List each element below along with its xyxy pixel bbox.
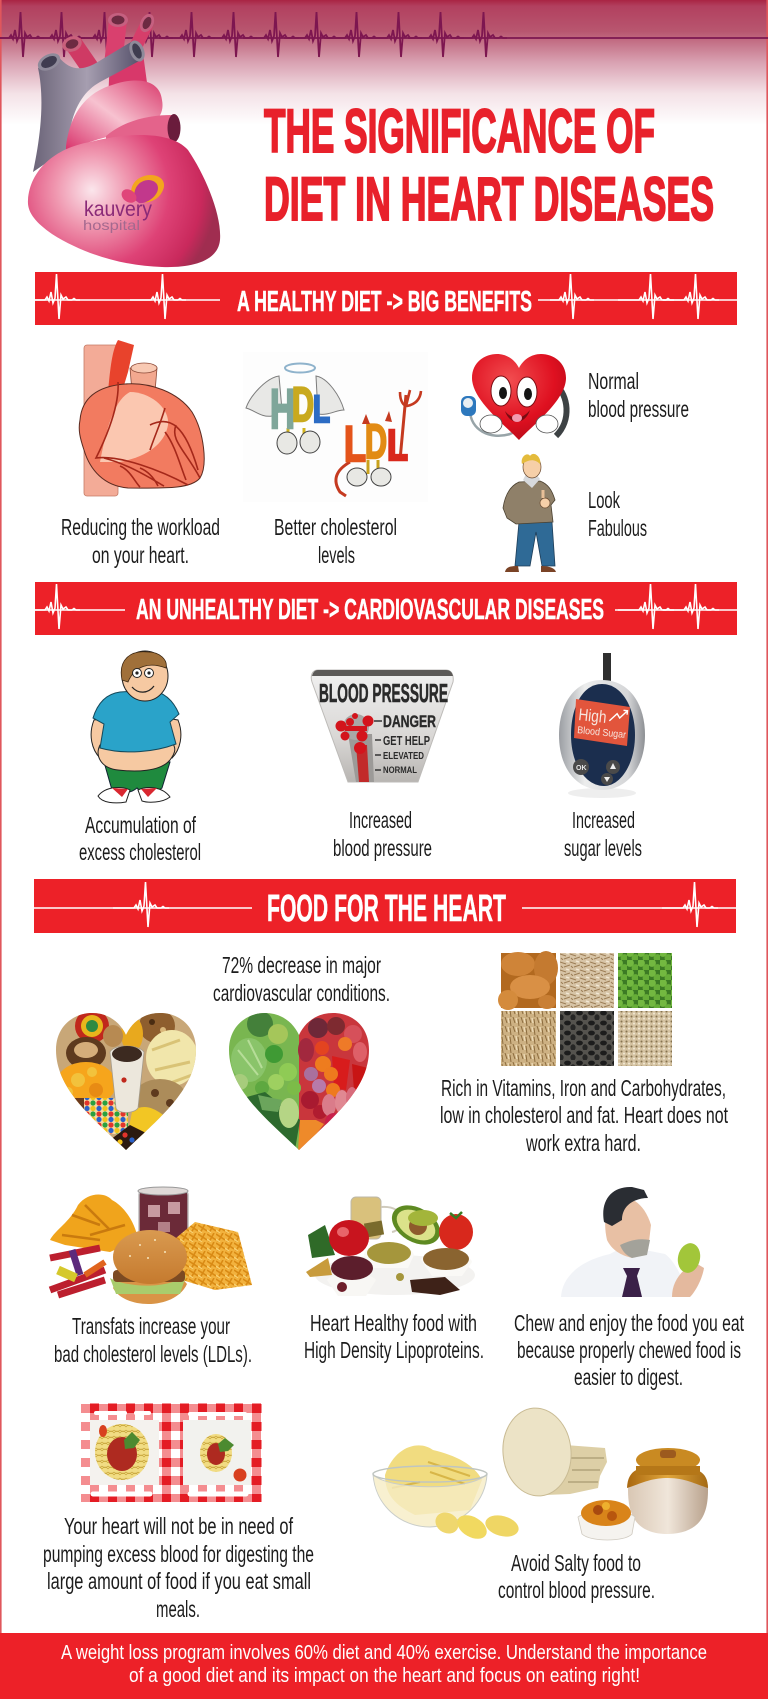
tile: oats: [560, 953, 614, 1008]
label: increased blood pressure: [333, 807, 432, 861]
label: your heart will not: meals.: [156, 1596, 200, 1622]
icon: HDL and LDL characters: L: [344, 416, 366, 472]
icon: man giving thumbs up: [503, 454, 556, 572]
pickle jar: [627, 1448, 708, 1534]
icon: glucose meter: Blood Sugar: [577, 725, 627, 741]
label: transfats: bad cholesterol levels (LDLs).: [54, 1341, 252, 1367]
label: better cholesterol: levels: [318, 542, 355, 568]
icon: junk food heart: [56, 1009, 198, 1155]
label: look fabulous: Fabulous: [588, 515, 647, 541]
header ECG line: [0, 12, 768, 57]
footer banner: [0, 1633, 768, 1699]
image grid: grains, pulses and potatoes: [498, 951, 672, 1066]
icon: large heart with logo: [28, 12, 220, 267]
label: avoid salty food: Avoid Salty food to: [511, 1550, 641, 1576]
label: your heart will not: [43, 1513, 314, 1622]
label: heart healthy food: High Density Lipoproteins.: [304, 1337, 484, 1363]
label: chew and enjoy: easier to digest.: [574, 1364, 683, 1390]
label: reducing the workload: [61, 514, 220, 568]
icon: blood pressure gauge: NORMAL: [383, 765, 417, 776]
label: reducing the workload: on your heart.: [92, 542, 189, 568]
label: 72% decrease: 72% decrease in major: [222, 952, 381, 978]
label: normal blood pressure: [588, 368, 689, 422]
label: reducing the workload: Reducing the workload: [61, 514, 220, 540]
icon: glucose meter: [559, 653, 645, 798]
label: better cholesterol: [274, 514, 397, 568]
label: heart healthy food: [304, 1310, 484, 1363]
label: 72% decrease: cardiovascular conditions.: [213, 980, 390, 1006]
label: your heart will not: large amount of food if you eat small: [47, 1568, 311, 1594]
tile: wheat: [501, 1011, 556, 1066]
icon: blood pressure gauge: BLOOD PRESSURE: [319, 678, 448, 708]
label: accumulation of excess cholesterol: excess cholesterol: [79, 839, 201, 865]
banner: a healthy diet: [24, 272, 737, 325]
banner: a healthy diet: A HEALTHY DIET -> BIG BENEFITS: [237, 286, 532, 318]
tile: black beans: [560, 1011, 614, 1066]
label: accumulation of excess cholesterol: [79, 812, 201, 865]
label: rich in vitamins: work extra hard.: [525, 1130, 641, 1156]
icon: glucose meter: OK: [576, 765, 586, 772]
banner: food for the heart: FOOD FOR THE HEART: [267, 888, 506, 930]
icon: heart healthy food: [306, 1197, 475, 1296]
label: increased blood pressure: blood pressure: [333, 835, 432, 861]
label: rich in vitamins: [440, 1075, 728, 1156]
banner: food for the heart: [34, 879, 736, 933]
pickle bowl: [578, 1500, 635, 1540]
label: your heart will not: pumping excess blood for digesting the: [43, 1541, 314, 1567]
label: your heart will not: Your heart will not be in need of: [64, 1513, 293, 1539]
banner: an unhealthy diet: [24, 582, 737, 635]
icon: blood pressure gauge: GET HELP: [383, 734, 430, 748]
label: increased blood pressure: Increased: [349, 807, 412, 833]
label: increased sugar levels: Increased: [572, 807, 635, 833]
label: 72% decrease: [213, 952, 390, 1006]
icon: blood pressure gauge: DANGER: [383, 713, 436, 731]
title: [264, 97, 714, 233]
icon: anatomical heart: [79, 340, 204, 496]
label: look fabulous: [588, 487, 647, 541]
icon: placemat with large and small meals: [81, 1403, 262, 1502]
chips bowl: [373, 1445, 521, 1544]
logo: kauvery hospital: [83, 175, 164, 233]
label: transfats: [54, 1313, 252, 1367]
icon: HDL and LDL characters: H: [270, 377, 295, 440]
label: heart healthy food: Heart Healthy food with: [310, 1310, 477, 1336]
label: transfats: Transfats increase your: [72, 1313, 230, 1339]
icon: HDL and LDL characters: L: [387, 421, 408, 470]
label: avoid salty food: control blood pressure.: [498, 1577, 655, 1603]
logo: kauvery hospital: hospital: [83, 217, 140, 233]
label: better cholesterol: Better cholesterol: [274, 514, 397, 540]
icon: chips, papad and pickle jar: [373, 1405, 708, 1544]
tile: sesame: [618, 1011, 672, 1066]
icon: blood pressure gauge: ELEVATED: [383, 750, 424, 762]
icon: blood pressure gauge: [311, 670, 453, 782]
label: look fabulous: Look: [588, 487, 620, 513]
label: increased sugar levels: sugar levels: [564, 835, 642, 861]
icon: vegetable heart: [229, 1011, 369, 1150]
label: accumulation of excess cholesterol: Accumulation of: [85, 812, 196, 838]
label: normal blood pressure: blood pressure: [588, 396, 689, 422]
icon: smiling heart with blood pressure cuff: [461, 354, 567, 440]
icon: HDL and LDL characters: D: [365, 416, 387, 469]
icon: HDL and LDL characters: L: [313, 389, 330, 431]
icon: HDL and LDL characters: D: [292, 379, 314, 432]
label: chew and enjoy: [514, 1310, 744, 1390]
label: increased sugar levels: [564, 807, 642, 861]
icon: fast food: [49, 1187, 252, 1304]
label: avoid salty food: [498, 1550, 655, 1603]
label: normal blood pressure: Normal: [588, 368, 639, 394]
icon: glucose meter: High: [578, 705, 607, 727]
papad stack: [499, 1405, 607, 1499]
logo: kauvery hospital: kauvery: [84, 198, 152, 221]
footer banner: of a good diet and its impact on the heart and focus on eating right!: [129, 1665, 640, 1687]
icon: HDL and LDL characters: [243, 352, 428, 502]
icon: overweight man: [91, 651, 181, 803]
tile: peas: [618, 953, 672, 1008]
tile: potatoes: [498, 951, 558, 1010]
icon: man chewing with apple: [561, 1187, 704, 1297]
